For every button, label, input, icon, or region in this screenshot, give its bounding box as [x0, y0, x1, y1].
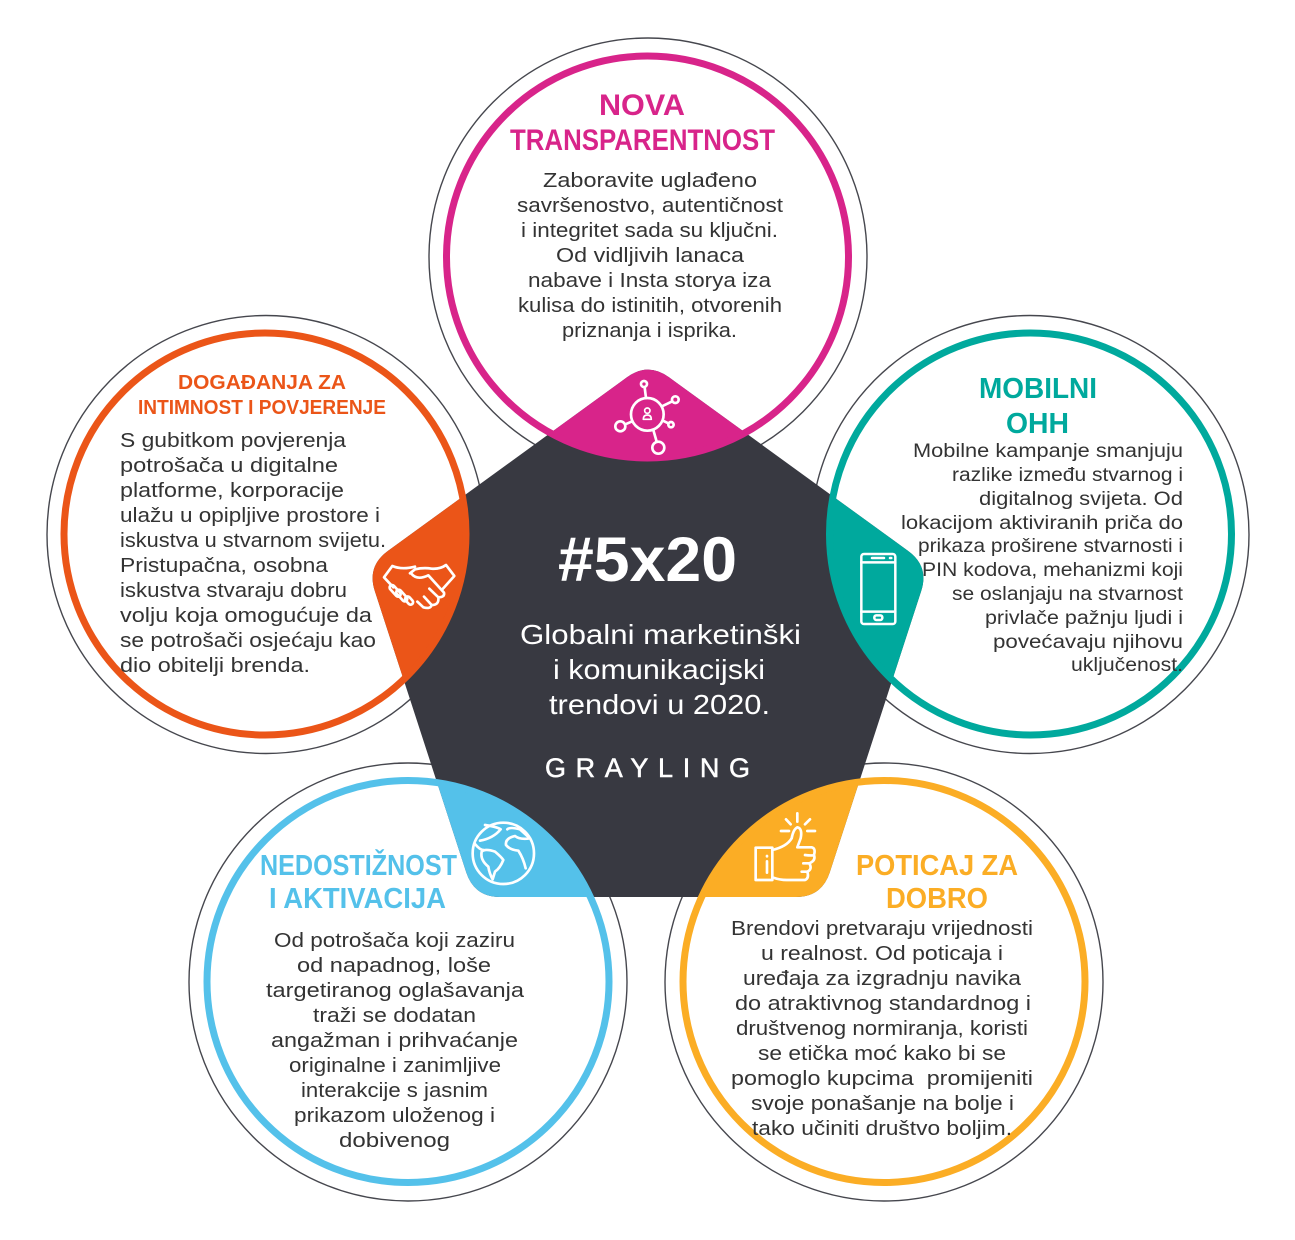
body text: se potrošači osjećaju kao	[120, 630, 376, 652]
body text: Mobilne kampanje smanjuju	[913, 441, 1183, 462]
heading: NEDOSTIŽNOST	[260, 848, 457, 882]
teal pentagon tip	[833, 498, 924, 676]
heading: DOGAĐANJA ZA	[178, 372, 346, 394]
body text: priznanja i isprika.	[562, 320, 737, 342]
blue pentagon tip	[438, 786, 586, 897]
body text: razlike između stvarnog i	[952, 465, 1183, 486]
panel: nedostižnost i aktivacija	[204, 777, 612, 1186]
body text: originalne i zanimljive	[289, 1055, 501, 1077]
heading: NOVA	[599, 89, 685, 122]
body text: lokacijom aktiviranih priča do	[901, 513, 1183, 534]
heading	[979, 373, 1097, 440]
body text: do atraktivnog standardnog i	[735, 993, 1031, 1015]
body text: prikaza proširene stvarnosti i	[918, 536, 1183, 557]
body text: u realnost. Od poticaja i	[761, 943, 1003, 965]
subtitle	[520, 619, 801, 720]
body text: Pristupačna, osobna	[120, 555, 329, 577]
body text: kulisa do istinitih, otvorenih	[518, 295, 782, 317]
icon: handshake	[384, 565, 454, 608]
body text	[731, 918, 1033, 1140]
heading: I AKTIVACIJA	[269, 883, 446, 915]
body text: se oslanjaju na stvarnost	[952, 584, 1184, 605]
body text: Od vidljivih lanaca	[556, 245, 745, 267]
body text: interakcije s jasnim	[301, 1080, 488, 1102]
pink ring	[446, 56, 848, 458]
subtitle: i komunikacijski	[553, 654, 765, 685]
central pentagon	[373, 370, 923, 897]
heading	[260, 848, 457, 915]
heading: TRANSPARENTNOST	[510, 124, 775, 157]
pink pentagon tip	[554, 370, 742, 454]
body text: platforme, korporacije	[120, 480, 344, 502]
body text: prikazom uloženog i	[294, 1105, 495, 1127]
panel: događanja za intimnost i povjerenje	[60, 330, 470, 738]
center title block	[520, 525, 801, 783]
panel: mobilni ohh	[826, 330, 1235, 738]
body text: iskustva u stvarnom svijetu.	[120, 530, 386, 552]
body text: Brendovi pretvaraju vrijednosti	[731, 918, 1033, 940]
body text: ulažu u opipljive prostore i	[120, 505, 380, 527]
body text	[517, 170, 783, 342]
teal ring	[830, 333, 1232, 735]
heading: DOBRO	[886, 883, 988, 915]
body text: angažman i prihvaćanje	[271, 1030, 518, 1052]
grayling logo: GRAYLING	[545, 753, 750, 783]
body text: Zaboravite uglađeno	[543, 170, 757, 192]
body text: tako učiniti društvo boljim.	[752, 1118, 1012, 1140]
icon: thumbs up	[756, 813, 815, 880]
body text: traži se dodatan	[313, 1005, 476, 1027]
body text: savršenostvo, autentičnost	[517, 195, 783, 217]
yellow pentagon tip	[706, 786, 858, 897]
heading: MOBILNI	[979, 373, 1097, 405]
heading	[510, 89, 775, 157]
body text: S gubitkom povjerenja	[120, 430, 347, 452]
body text: digitalnog svijeta. Od	[979, 489, 1183, 510]
body text: od napadnog, loše	[297, 955, 491, 977]
blue ring	[207, 780, 609, 1182]
icon: globe	[473, 823, 534, 884]
body text: i integritet sada su ključni.	[521, 220, 778, 242]
body text: pomoglo kupcima promijeniti	[731, 1068, 1033, 1090]
panel: nova transparentnost	[443, 52, 852, 462]
orange pentagon tip	[372, 499, 462, 676]
icon: network with person	[615, 381, 679, 454]
body text: Od potrošača koji zaziru	[274, 930, 515, 952]
body text: PIN kodova, mehanizmi koji	[922, 560, 1183, 581]
body text	[120, 430, 386, 677]
yellow ring	[683, 780, 1085, 1182]
body text	[266, 930, 525, 1152]
body text: potrošača u digitalne	[120, 455, 338, 477]
heading	[856, 850, 1018, 915]
body text: iskustva stvaraju dobru	[120, 580, 347, 602]
heading: INTIMNOST I POVJERENJE	[138, 397, 386, 419]
body text: dobivenog	[339, 1130, 450, 1152]
heading: POTICAJ ZA	[856, 850, 1018, 882]
subtitle: Globalni marketinški	[520, 619, 801, 650]
hashtag title: #5x20	[558, 525, 737, 595]
body text: povećavaju njihovu	[993, 632, 1183, 653]
heading	[138, 372, 386, 419]
heading: OHH	[1006, 408, 1069, 440]
body text: svoje ponašanje na bolje i	[751, 1093, 1014, 1115]
body text: društvenog normiranja, koristi	[736, 1018, 1028, 1040]
body text	[901, 441, 1184, 676]
body text: nabave i Insta storya iza	[528, 270, 772, 292]
body text: dio obitelji brenda.	[120, 655, 310, 677]
icon: smartphone	[861, 554, 895, 624]
body text: privlače pažnju ljudi i	[985, 608, 1183, 629]
orange ring	[64, 333, 466, 735]
subtitle: trendovi u 2020.	[549, 689, 770, 720]
body text: volju koja omogućuje da	[120, 605, 373, 627]
body text: uključenost.	[1071, 655, 1183, 676]
body text: uređaja za izgradnju navika	[743, 968, 1022, 990]
panel: poticaj za dobro	[680, 777, 1088, 1186]
body text: se etička moć kako bi se	[758, 1043, 1006, 1065]
body text: targetiranog oglašavanja	[266, 980, 525, 1002]
